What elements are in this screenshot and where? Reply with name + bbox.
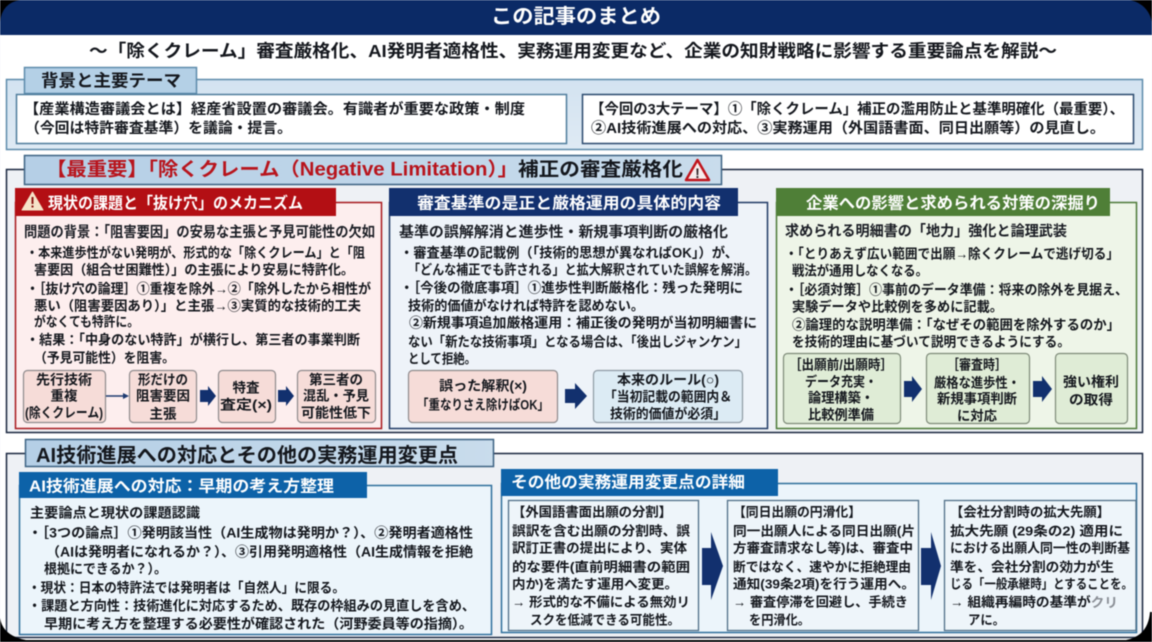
heading: negative limitation: 補正の審査厳格化 xyxy=(518,158,683,180)
standards text: ②新規事項追加厳格運用：補正後の発明が当初明細書に xyxy=(409,314,757,330)
impact text: 実験データや比較例を多めに記載。 xyxy=(792,298,1003,314)
panel: corporate impact xyxy=(776,188,1136,428)
issue text: がなくても特許に。 xyxy=(34,314,139,330)
heading: AI and other changes: AI技術進展への対応とその他の実務運用変更点 xyxy=(36,443,458,467)
flow: loophole: 第三者の xyxy=(309,372,363,388)
panel: other practice changes xyxy=(501,469,1136,632)
icon: warning: ! xyxy=(695,165,700,181)
box: same-day filing: 【同日出願の円滑化】 xyxy=(733,504,861,520)
text box: three themes: 【今回の3大テーマ】①「除くクレーム」補正の濫用防止と基準明確化（最重要）、 xyxy=(590,100,1124,118)
heading: negative limitation xyxy=(24,156,722,184)
standards text: ない「新たな技術事項」となる場合は、「後出しジャンケン」 xyxy=(408,334,747,350)
box: same-day filing: 方審査請求なし等)は、審査中 xyxy=(733,540,913,556)
panel: background and main themes xyxy=(6,68,1142,150)
flow: loophole xyxy=(24,370,376,422)
impact text: ・［必須対策］①事前のデータ準備：将来の除外を見据え、 xyxy=(785,282,1128,298)
standards text: 技術的価値がなければ特許を認めない。 xyxy=(408,298,644,314)
box: same-day filing: 通知(39条2項)を行う運用へ。 xyxy=(733,576,915,592)
box: foreign language filing: スクを低減できる可能性。 xyxy=(530,612,680,628)
flow: loophole: 形だけの xyxy=(138,372,188,388)
impact text: ②論理的な説明準備：「なぜその範囲を除外するのか」 xyxy=(792,316,1120,332)
flow: loophole: 阻害要因 xyxy=(136,388,190,404)
flow: loophole: 特査 xyxy=(232,380,260,396)
AI text: 早期に考え方を整理する必要性が確認された（河野委員等の指摘）。 xyxy=(44,616,473,632)
flow: loophole: 査定(×) xyxy=(220,396,272,412)
box: same-day filing xyxy=(728,500,918,630)
flow: filing to strong rights: の取得 xyxy=(1069,392,1113,408)
issue text: 問題の背景：「阻害要因」の安易な主張と予見可能性の欠如 xyxy=(24,223,375,241)
impact text: を技術的理由に基づいて説明できるようにする。 xyxy=(792,334,1070,350)
box: foreign language filing: 訳訂正書の提出により、実体 xyxy=(512,540,688,556)
text box: council: 【産業構造審議会とは】経産省設置の審議会。有識者が重要な政策・制度 xyxy=(24,100,526,118)
standards text: 「どんな補正でも許される」と拡大解釈されていた誤解を解消。 xyxy=(408,262,757,278)
AI text xyxy=(28,504,475,632)
subtitle: ～「除くクレーム」審査厳格化、AI発明者適格性、実務運用変更など、企業の知財戦略に影響する重要論点を解説～ xyxy=(89,41,1057,61)
AI text: 根拠にできるか？）。 xyxy=(44,560,167,576)
flow: loophole: 可能性低下 xyxy=(301,404,371,420)
AI text: （AIは発明者になれるか？）、③引用発明適格性（AI生成情報を拒絶 xyxy=(46,544,474,560)
panel: other practice changes: その他の実務運用変更点の詳細 xyxy=(511,472,745,492)
box: corporate split: アに。 xyxy=(968,612,1005,628)
panel: corporate impact: 企業への影響と求められる対策の深掘り xyxy=(806,194,1100,212)
AI text: ・［3つの論点］①発明該当性（AI生成物は発明か？）、②発明者適格性 xyxy=(28,524,474,540)
text box: council xyxy=(16,94,566,144)
flow: wrong interpretation to correct rule: 「重なりさえ除けばOK」 xyxy=(417,396,549,412)
flow: wrong interpretation to correct rule: 「当初記載の範囲内＆ xyxy=(604,388,732,404)
box: foreign language filing: 内か)を満たす運用へ変更。 xyxy=(512,576,678,592)
box: foreign language filing: 【外国語書面出願の分割】 xyxy=(512,504,672,520)
standards text xyxy=(399,223,757,366)
flow: filing to strong rights: 新規事項判断 xyxy=(937,390,1017,406)
heading: background and themes xyxy=(24,68,196,94)
flow: filing to strong rights: 強い権利 xyxy=(1063,374,1119,390)
panel: negative limitation xyxy=(6,156,1142,432)
issue text: 悪い（阻害要因あり）」と主張→③実質的な技術的工夫 xyxy=(34,298,361,314)
box: foreign language filing: 誤訳を含む出願の分割時、誤 xyxy=(512,522,690,538)
issue text: （予見可能性）を阻害。 xyxy=(34,350,175,366)
flow: wrong interpretation to correct rule: 誤った解釈(×) xyxy=(439,378,527,394)
standards text: 基準の誤解解消と進歩性・新規事項判断の厳格化 xyxy=(399,223,729,241)
panel: AI and other practice changes xyxy=(6,440,1142,638)
flow: filing to strong rights xyxy=(784,354,1128,424)
flow: filing to strong rights: ［出願前/出願時］ xyxy=(789,356,893,372)
flow: filing to strong rights: データ充実・ xyxy=(805,374,877,390)
flow: filing to strong rights: ［審査時］ xyxy=(947,356,1007,372)
text box: three themes: ②AI技術進展への対応、③実務運用（外国語書面、同日出願等）の見直し。 xyxy=(591,119,1105,137)
panel: current issues xyxy=(15,188,382,428)
arrow xyxy=(702,532,723,600)
impact text: 求められる明細書の「地力」強化と論理武装 xyxy=(785,222,1067,240)
flow: loophole: 主張 xyxy=(150,406,177,422)
box: corporate split xyxy=(944,500,1136,630)
icon: warning triangle xyxy=(22,192,43,210)
box: same-day filing: を円滑化。 xyxy=(749,612,810,628)
flow: wrong interpretation to correct rule xyxy=(408,370,742,422)
box: corporate split: 【会社分割時の拡大先願】 xyxy=(950,504,1110,520)
box: corporate split: 準を、会社分割の効力が生 xyxy=(950,558,1114,574)
flow: loophole: 先行技術 xyxy=(36,372,93,388)
flow: loophole: 重複 xyxy=(50,388,78,404)
panel: current issues: 現状の課題と「抜け穴」のメカニズム xyxy=(48,194,303,212)
box: foreign language filing: → 形式的な不備による無効リ xyxy=(512,594,690,610)
panel: AI response: AI技術進展への対応：早期の考え方整理 xyxy=(29,476,334,496)
text box: council: （今回は特許審査基準）を議論・提言。 xyxy=(25,119,292,137)
issue text: ・本来進歩性がない発明が、形式的な「除くクレーム」と「阻 xyxy=(26,244,365,260)
AI text: 主要論点と現状の課題認識 xyxy=(30,504,201,520)
box: corporate split: 拡大先願 (29条の2) 適用に xyxy=(950,522,1123,538)
AI text: ・現状：日本の特許法では発明者は「自然人」に限る。 xyxy=(28,580,345,596)
flow: wrong interpretation to correct rule: 本来のルール(○) xyxy=(617,372,719,388)
flow: loophole: 混乱・予見 xyxy=(303,388,369,404)
issue text: 害要因（組合せ困難性）」の主張により安易に特許化。 xyxy=(34,262,354,278)
flow: filing to strong rights: に対応 xyxy=(957,408,997,424)
panel: examination standards: 審査基準の是正と厳格運用の具体的内容 xyxy=(417,194,721,212)
box: foreign language filing xyxy=(508,500,698,630)
AI text: ・課題と方向性：技術進化に対応するため、既存の枠組みの見直しを含め、 xyxy=(28,598,475,614)
issue text: ・結果：「中身のない特許」が横行し、第三者の事業判断 xyxy=(26,332,360,348)
flow: loophole: (除くクレーム) xyxy=(25,404,103,420)
flow: filing to strong rights: 厳格な進歩性・ xyxy=(934,374,1020,390)
impact text xyxy=(785,222,1128,350)
arrow xyxy=(921,532,941,600)
box: same-day filing: → 審査停滞を回避し、手続き xyxy=(733,594,908,610)
standards text: ・審査基準の記載例（「技術的思想が異なればOK」）が、 xyxy=(400,244,738,260)
box: same-day filing: 同一出願人による同日出願(片 xyxy=(733,524,915,538)
panel: examination standards xyxy=(389,188,768,428)
title: この記事のまとめ xyxy=(491,5,661,28)
standards text: として拒絶。 xyxy=(408,350,476,366)
flow: wrong interpretation to correct rule: 技術的価値が必須」 xyxy=(610,406,726,422)
flow: filing to strong rights: 比較例準備 xyxy=(808,406,874,422)
panel: AI response xyxy=(19,472,492,634)
icon: warning xyxy=(686,160,709,181)
header banner xyxy=(0,0,1152,35)
box: corporate split: における出願人同一性の判断基 xyxy=(950,540,1130,556)
text box: three themes xyxy=(582,94,1134,144)
box: corporate split: → 組織再編時の基準が クリ xyxy=(950,594,1118,610)
issue text: ・［抜け穴の論理］①重複を除外→②「除外したから相性が xyxy=(26,280,371,296)
standards text: ・［今後の徹底事項］①進歩性判断厳格化：残った発明に xyxy=(400,280,743,296)
box: same-day filing: 断ではなく、速やかに拒絶理由 xyxy=(733,558,911,574)
flow: filing to strong rights: 論理構築・ xyxy=(808,390,874,406)
impact text: 戦法が通用しなくなる。 xyxy=(792,262,928,278)
impact text: ・「とりあえず広い範囲で出願→除くクレームで逃げ切る」 xyxy=(785,246,1119,262)
issue text xyxy=(24,223,375,366)
heading: negative limitation: 【最重要】「除くクレーム（Negative Limitation）」 xyxy=(46,158,518,180)
heading: background and themes: 背景と主要テーマ xyxy=(41,72,181,90)
box: foreign language filing: 的な要件(直前明細書の範囲 xyxy=(512,558,690,574)
